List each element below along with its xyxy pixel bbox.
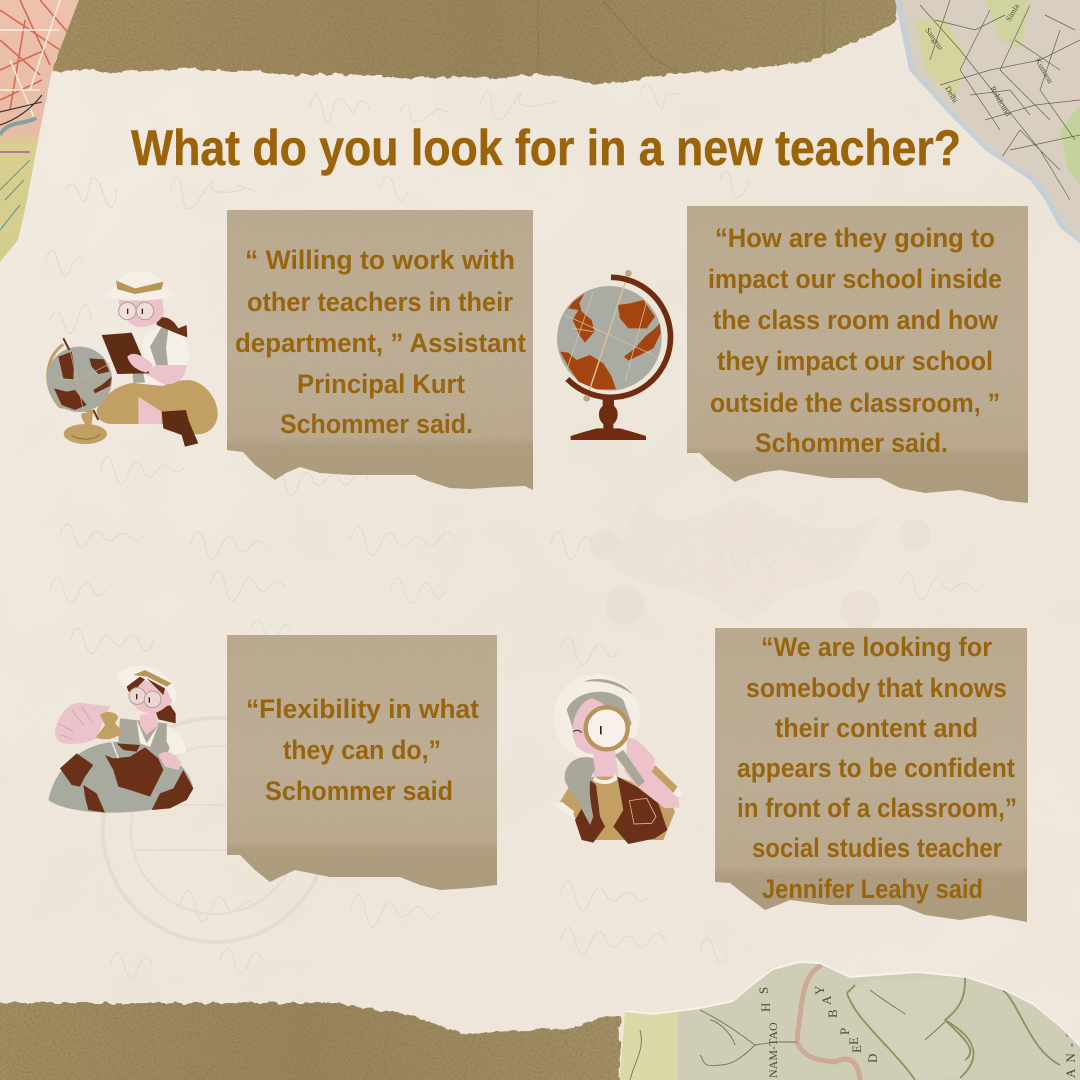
globe sphere (557, 286, 662, 391)
quote 4 text (737, 632, 1017, 904)
panel: quote 1 (227, 210, 533, 490)
quote 4 text: Jennifer Leahy said (762, 874, 983, 904)
arm and hand (623, 760, 679, 808)
face (130, 680, 173, 715)
half globe (48, 742, 193, 813)
face (572, 698, 620, 754)
stand (571, 397, 646, 440)
hat (553, 674, 640, 761)
map scrap: top right: Sangrur (923, 26, 945, 52)
map scrap: top right: Rohilcund (988, 84, 1013, 118)
shirt (560, 777, 675, 840)
map scrap: bottom right: H (758, 1003, 773, 1012)
explorer torso (133, 325, 190, 386)
map scrap: bottom right: E (849, 1045, 864, 1053)
decorative ornament watermark (589, 495, 931, 630)
icon: explorer pinning a globe (48, 666, 193, 813)
quote 2 text: Schommer said. (755, 428, 948, 458)
magnifier lens (586, 707, 628, 749)
small globe stand (81, 412, 93, 425)
map scrap: top right: Delhi (943, 84, 960, 105)
quote 4 text: appears to be confident (737, 753, 1015, 783)
quote 2 text (708, 223, 1002, 458)
explorer hair (157, 317, 187, 337)
continents (60, 743, 193, 813)
continents (560, 293, 661, 389)
quote 3 text: “Flexibility in what (246, 694, 479, 724)
map scrap: bottom right (620, 960, 1080, 1080)
hair bun (155, 705, 176, 723)
quote 2 torn paper (687, 206, 1028, 503)
cardboard crease (538, 0, 824, 72)
map scrap: bottom right: Y (812, 985, 827, 995)
quote 1 text: “ Willing to work with (245, 245, 515, 275)
hair (567, 692, 632, 747)
panel: quote 2 (687, 206, 1028, 503)
map scrap: top right: Kumaon (1033, 56, 1055, 85)
quote 1 text: Schommer said. (280, 409, 473, 439)
meridian arm (567, 277, 670, 397)
torn cardboard: bottom (0, 1003, 620, 1080)
quote 4 torn paper (715, 628, 1027, 922)
quote 4 text: social studies teacher (752, 833, 1002, 863)
graticule lines (565, 292, 653, 382)
quote 2 text: outside the classroom, ” (710, 388, 1000, 418)
decorative postage stamp (103, 718, 327, 942)
quote 4 text: somebody that knows (746, 673, 1007, 703)
explorer legs (97, 380, 218, 434)
map scrap: top right: Simla (1004, 2, 1021, 23)
vest (575, 777, 667, 844)
icon: explorer reading beside a globe (47, 272, 218, 447)
panel: quote 4 (715, 628, 1027, 922)
torn cardboard: top (52, 0, 900, 84)
quote 4 text: “We are looking for (761, 632, 992, 662)
quote 2 text: “How are they going to (715, 223, 995, 253)
hat back (116, 666, 176, 703)
quote 3 text: Schommer said (265, 776, 453, 806)
quote 2 text: the class room and how (713, 305, 999, 335)
quote 1 text (235, 245, 526, 439)
quote 1 torn paper (227, 210, 533, 490)
map scrap: bottom right: NAM-TAO (766, 1022, 780, 1078)
clipboard and hand (102, 333, 149, 374)
map scrap: bottom right: D (865, 1054, 880, 1063)
braid (565, 757, 595, 825)
quote 1 text: Principal Kurt (297, 369, 465, 399)
quote 4 text: in front of a classroom,” (737, 793, 1017, 823)
map scrap: bottom right: AN-T (1063, 1023, 1078, 1078)
quote 3 text (246, 694, 479, 806)
body (118, 718, 170, 763)
quote 2 text: they impact our school (717, 346, 993, 376)
fist (55, 703, 110, 744)
quote 3 text: they can do,” (283, 735, 441, 765)
title: What do you look for in a new teacher? (131, 120, 961, 176)
explorer head (118, 295, 164, 327)
quote 2 text: impact our school inside (708, 264, 1002, 294)
map scrap: bottom right: E (846, 1037, 861, 1045)
hand on globe (158, 752, 182, 770)
axis and pins (587, 273, 628, 398)
icon: explorer with magnifying glass (553, 674, 683, 844)
map scrap: top right (895, 0, 1080, 245)
map scrap: bottom right: A (819, 995, 834, 1005)
small globe (48, 344, 93, 412)
fringe (127, 677, 145, 692)
map scrap: bottom right: P (837, 1028, 852, 1035)
quote 1 text: department, ” Assistant (235, 328, 526, 358)
map scrap: top left (0, 0, 79, 262)
push pin (96, 712, 123, 739)
panel: quote 3 (227, 635, 497, 890)
quote 1 text: other teachers in their (247, 287, 513, 317)
map scrap: bottom right: B (825, 1009, 840, 1018)
quote 3 torn paper (227, 635, 497, 890)
explorer hat (105, 272, 175, 301)
icon: desk globe (557, 270, 670, 440)
quote 4 text: their content and (775, 713, 978, 743)
map scrap: bottom right: S (756, 987, 771, 994)
